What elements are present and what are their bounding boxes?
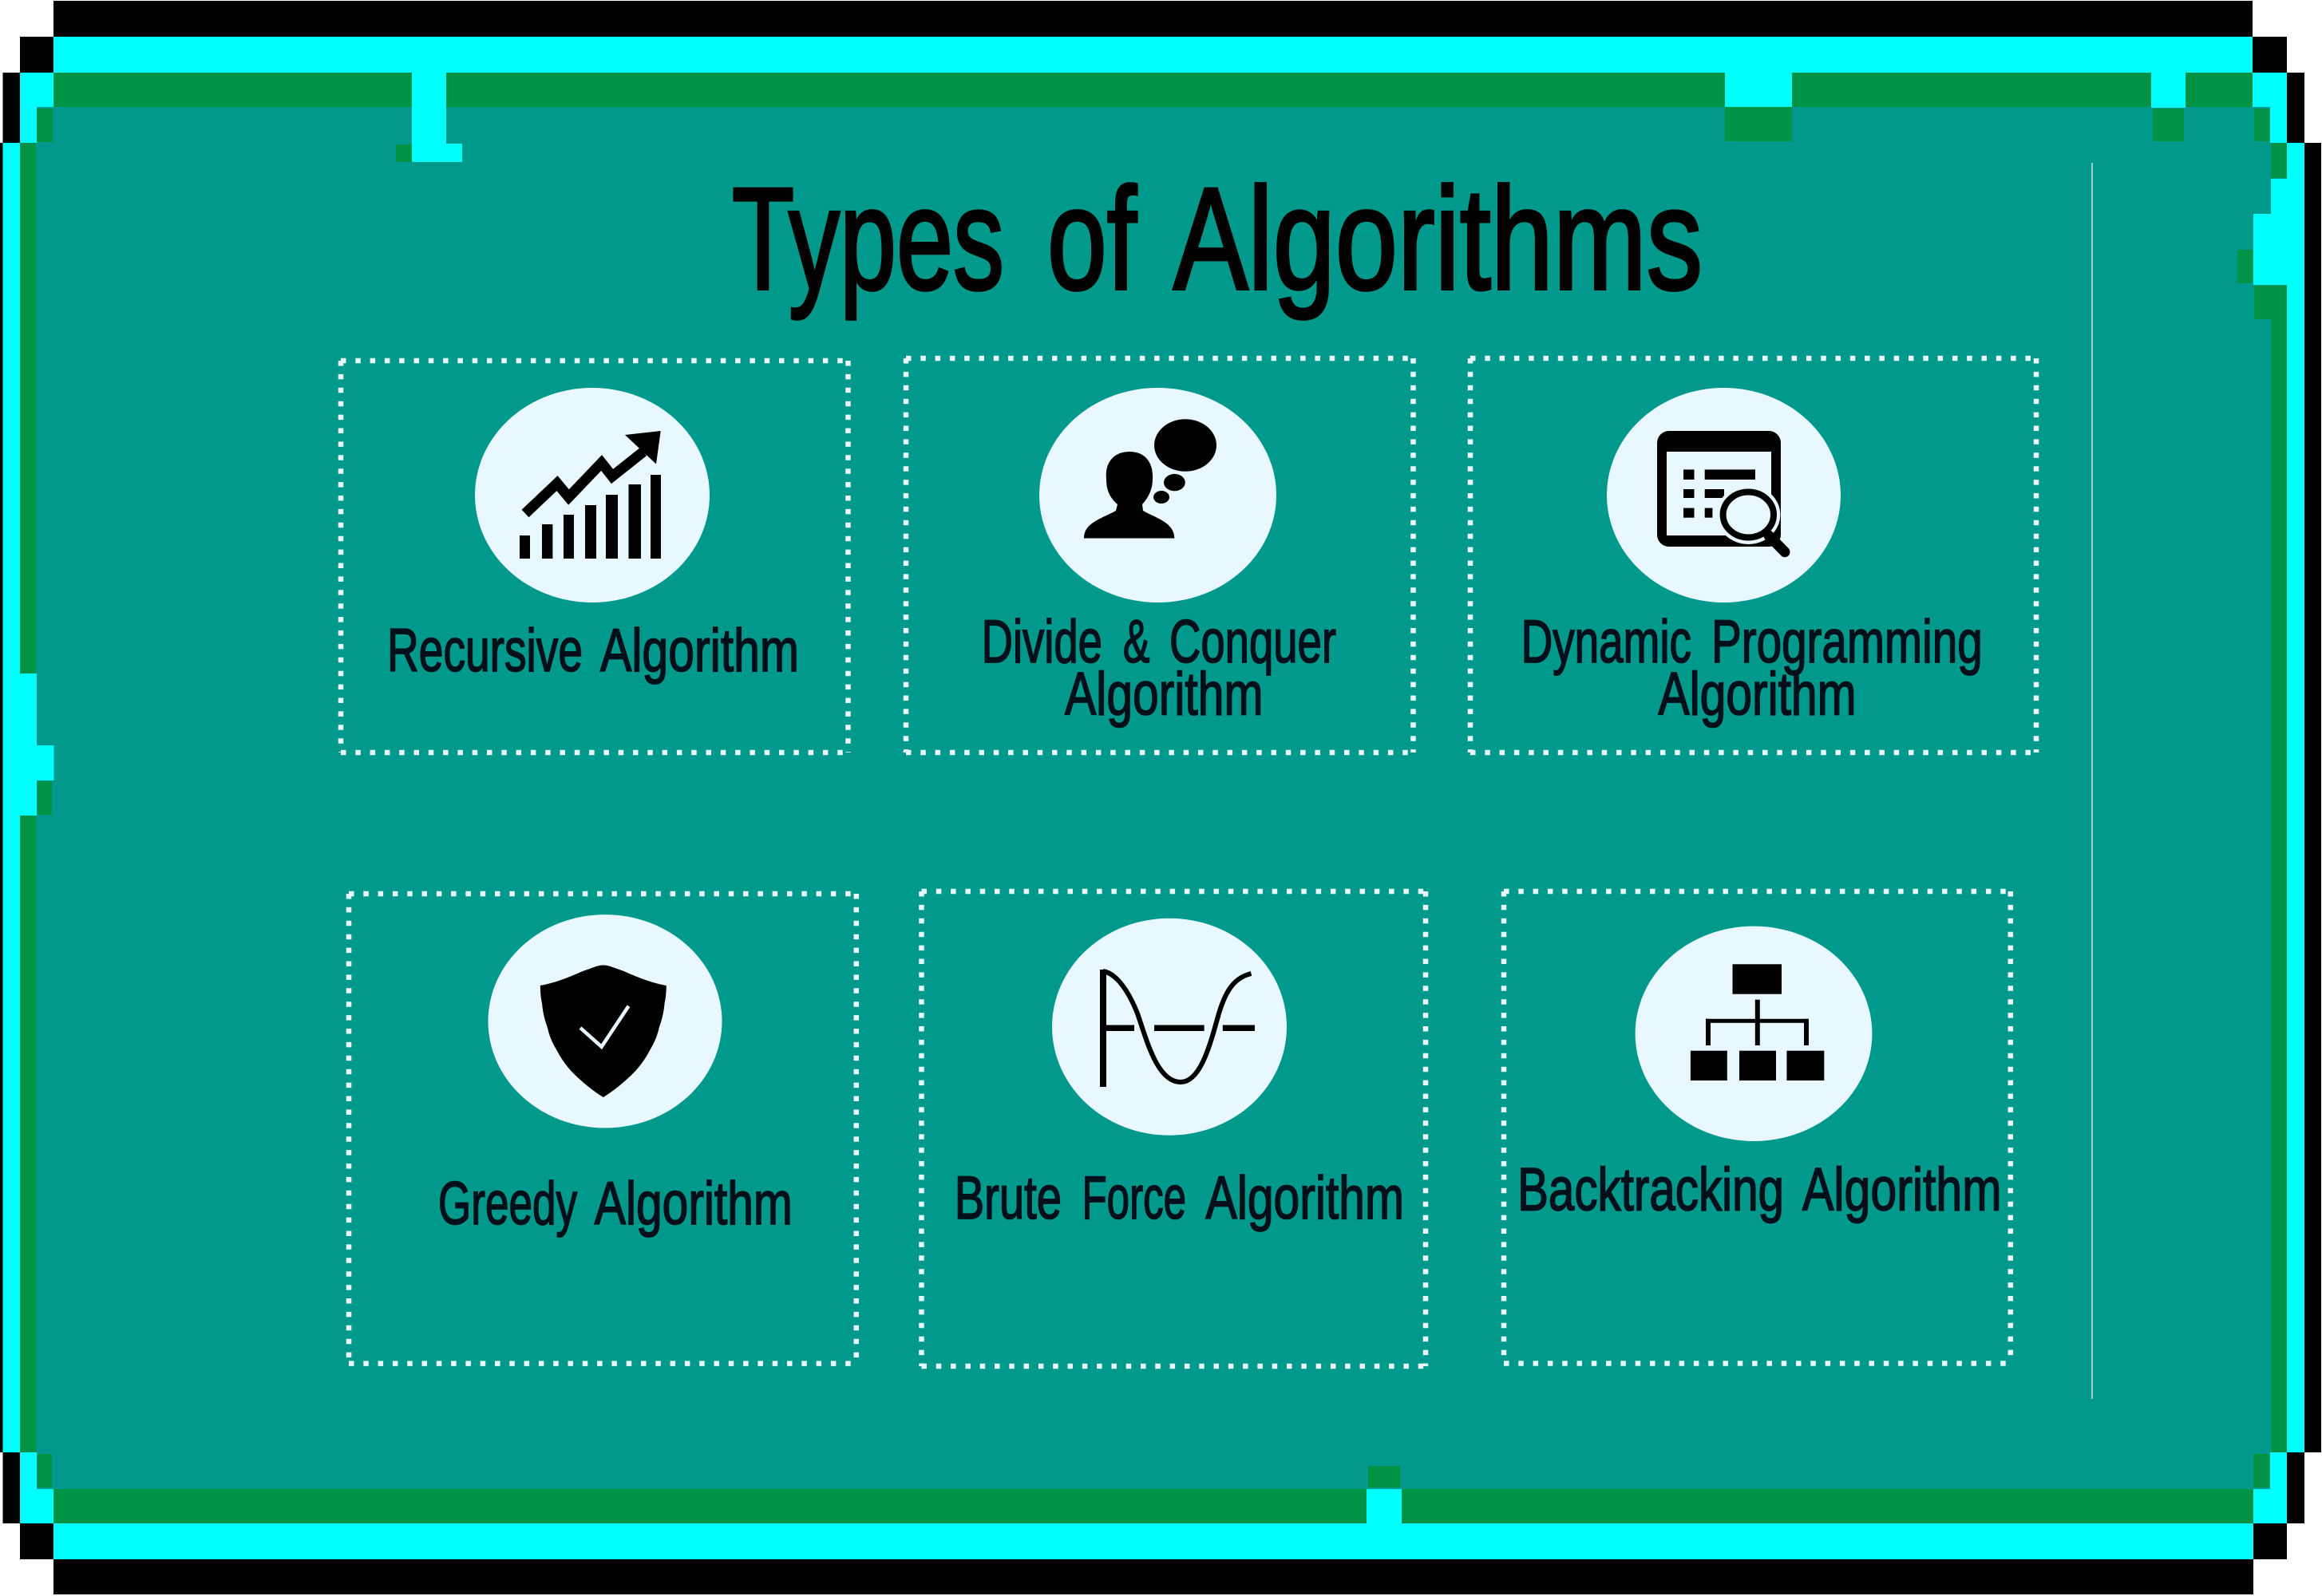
dotted frame	[341, 361, 848, 753]
dotted frame	[1504, 891, 2011, 1363]
panel: Dynamic Programming Algorithm	[1470, 358, 2036, 753]
label: Backtracking	[1517, 1156, 1784, 1224]
icon: person with thought bubble	[1084, 419, 1216, 538]
label: Dynamic	[1521, 608, 1691, 676]
title: Algorithms	[1173, 157, 1703, 320]
label	[982, 608, 1336, 729]
label: Conquer	[1169, 608, 1336, 676]
dotted frame	[349, 894, 856, 1364]
panel: Brute Force Algorithm	[921, 891, 1426, 1366]
panel: Greedy Algorithm	[349, 894, 856, 1364]
label: Brute	[955, 1164, 1062, 1232]
label: Algorithm	[600, 617, 799, 685]
icon background circle	[1039, 388, 1276, 602]
dotted frame	[921, 891, 1426, 1366]
panel: Backtracking Algorithm	[1504, 891, 2011, 1363]
icon: growth chart with arrow	[520, 431, 661, 559]
title: Types	[732, 157, 1004, 320]
panel: Recursive Algorithm	[341, 361, 848, 753]
dotted frame	[906, 358, 1413, 753]
icon: hierarchy tree	[1691, 964, 1824, 1080]
icon background circle	[489, 915, 722, 1128]
label: Algorithm	[1802, 1156, 2002, 1224]
label: Recursive	[387, 617, 583, 685]
label: Algorithm	[595, 1170, 793, 1238]
label: Greedy	[438, 1170, 577, 1238]
label: Divide	[982, 608, 1102, 676]
panel: Divide & Conquer Algorithm	[906, 358, 1413, 753]
icon: shield with check	[540, 966, 667, 1097]
icon: wave function on axes	[1100, 970, 1255, 1087]
icon background circle	[1052, 918, 1287, 1136]
label	[1521, 608, 1983, 729]
label: Algorithm	[1205, 1164, 1404, 1232]
title: of	[1047, 157, 1137, 320]
icon background circle	[1636, 926, 1872, 1141]
dotted frame	[1470, 358, 2036, 753]
icon: calculator table with magnifier	[1657, 431, 1785, 552]
label: Algorithm	[1065, 661, 1263, 729]
label: Force	[1082, 1164, 1186, 1232]
icon background circle	[475, 388, 710, 602]
label: Programming	[1711, 608, 1983, 676]
label: &	[1123, 608, 1149, 676]
icon background circle	[1607, 388, 1841, 602]
vertical rule on the right	[2091, 163, 2093, 1399]
label: Algorithm	[1659, 661, 1857, 729]
